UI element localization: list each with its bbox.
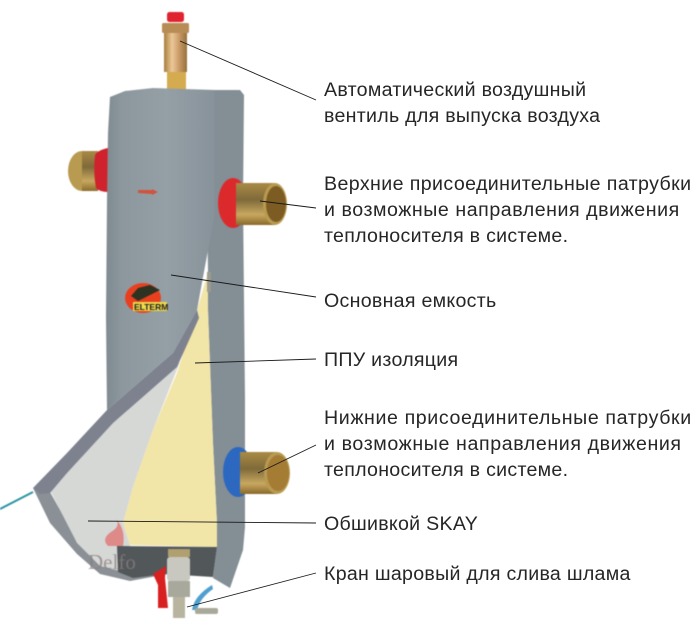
logo: Elterm <box>125 283 168 313</box>
watermark: flame logo: Delfo <box>88 550 136 574</box>
flap: lower grey edge <box>33 488 168 581</box>
foam: PPU insulation <box>123 272 217 547</box>
label: PPU insulation: ППУ изоляция <box>324 349 458 371</box>
label: air vent: Автоматический воздушный <box>324 79 586 101</box>
label: air vent <box>324 79 600 127</box>
pipe: top right nozzle <box>218 178 287 228</box>
label: lower nozzles: Нижние присоединительные патрубки <box>324 407 692 429</box>
label: air vent: вентиль для выпуска воздуха <box>324 105 600 127</box>
pipe: top left nozzle <box>68 148 108 192</box>
watermark: flame logo <box>88 519 136 574</box>
body: right strip of jacket <box>205 90 245 588</box>
label: main vessel: Основная емкость <box>324 290 496 312</box>
lining: inner light grey skay <box>50 362 180 574</box>
valve: drain ball valve <box>153 549 218 618</box>
label: upper nozzles: теплоносителя в системе. <box>324 225 568 247</box>
cord: blue drawstring <box>0 492 33 509</box>
body: main grey jacket <box>106 88 215 410</box>
label: lower nozzles <box>324 407 692 481</box>
valve: automatic air vent <box>162 12 189 89</box>
label: ball valve: Кран шаровый для слива шлама <box>324 563 631 585</box>
label: upper nozzles: и возможные направления движения <box>324 199 680 221</box>
logo: Elterm: ELTERM <box>134 302 168 312</box>
zip: jacket opening edge <box>33 310 199 494</box>
arrow: flow direction <box>138 189 158 195</box>
label: lower nozzles: теплоносителя в системе. <box>324 459 568 481</box>
label: skay lining: Обшивкой SKAY <box>324 513 478 535</box>
zipper slider <box>207 272 211 292</box>
tank: bottom of the vessel <box>117 546 217 578</box>
label: upper nozzles <box>324 173 692 247</box>
pipe: bottom right nozzle <box>223 447 290 497</box>
label: lower nozzles: и возможные направления движения <box>324 433 682 455</box>
label: upper nozzles: Верхние присоединительные патрубки <box>324 173 692 195</box>
